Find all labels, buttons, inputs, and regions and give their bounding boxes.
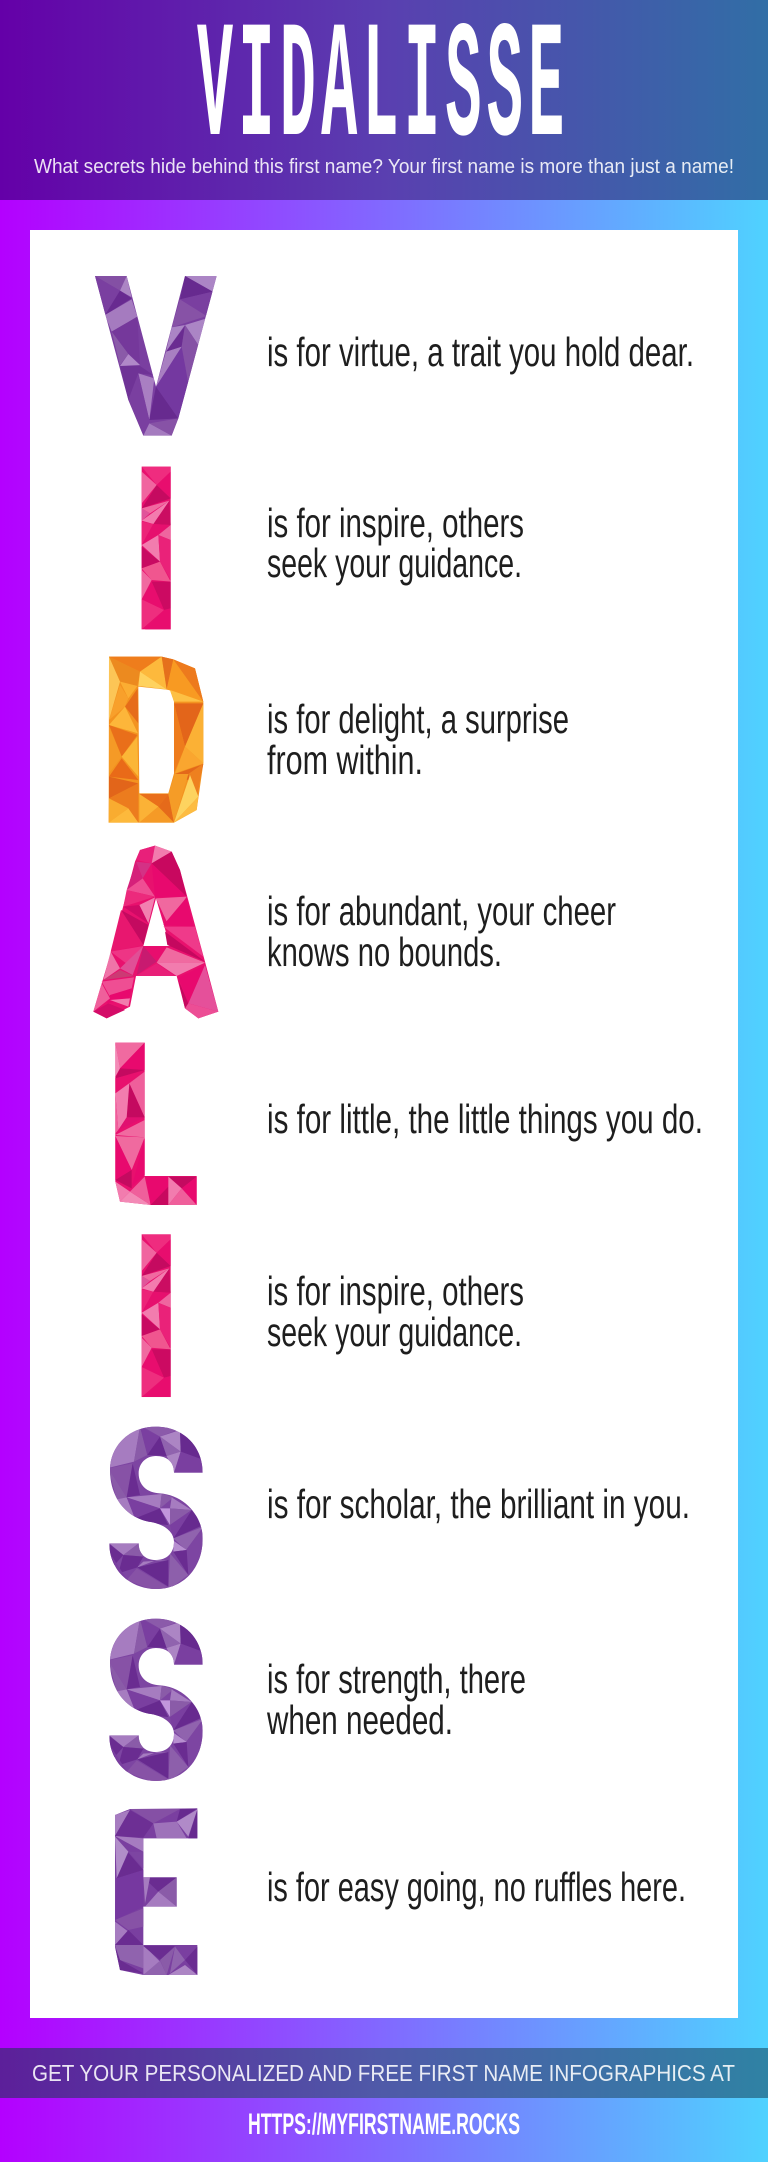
subtitle: What secrets hide behind this first name? Your first name is more than just a name! bbox=[34, 156, 734, 178]
letter D bbox=[109, 657, 203, 823]
letter I second bbox=[142, 1234, 171, 1397]
letter S second bbox=[109, 1618, 203, 1781]
letter E bbox=[115, 1808, 197, 1975]
text: D line 2: from within. bbox=[267, 737, 423, 783]
text: I second line 2: seek your guidance. bbox=[267, 1309, 522, 1355]
letter L bbox=[115, 1043, 197, 1205]
footer band bbox=[0, 2048, 768, 2098]
letter S bbox=[109, 1426, 203, 1589]
footer url: HTTPS://MYFIRSTNAME.ROCKS bbox=[248, 2108, 520, 2141]
text: I line: is for inspire, others bbox=[267, 500, 524, 546]
text: S second line 2: when needed. bbox=[266, 1697, 453, 1743]
header band bbox=[0, 0, 768, 200]
text: I line 2: seek your guidance. bbox=[267, 540, 522, 586]
text: I second line: is for inspire, others bbox=[267, 1268, 524, 1314]
text: S second line: is for strength, there bbox=[267, 1656, 526, 1702]
letter A bbox=[93, 846, 218, 1018]
letter V bbox=[95, 276, 217, 436]
text: A line 2: knows no bounds. bbox=[267, 929, 502, 975]
letter I bbox=[142, 467, 171, 629]
text: A line: is for abundant, your cheer bbox=[267, 888, 616, 934]
white content panel bbox=[30, 230, 738, 2018]
text: D line: is for delight, a surprise bbox=[267, 696, 569, 742]
title: VIDALISSE bbox=[197, 0, 570, 185]
